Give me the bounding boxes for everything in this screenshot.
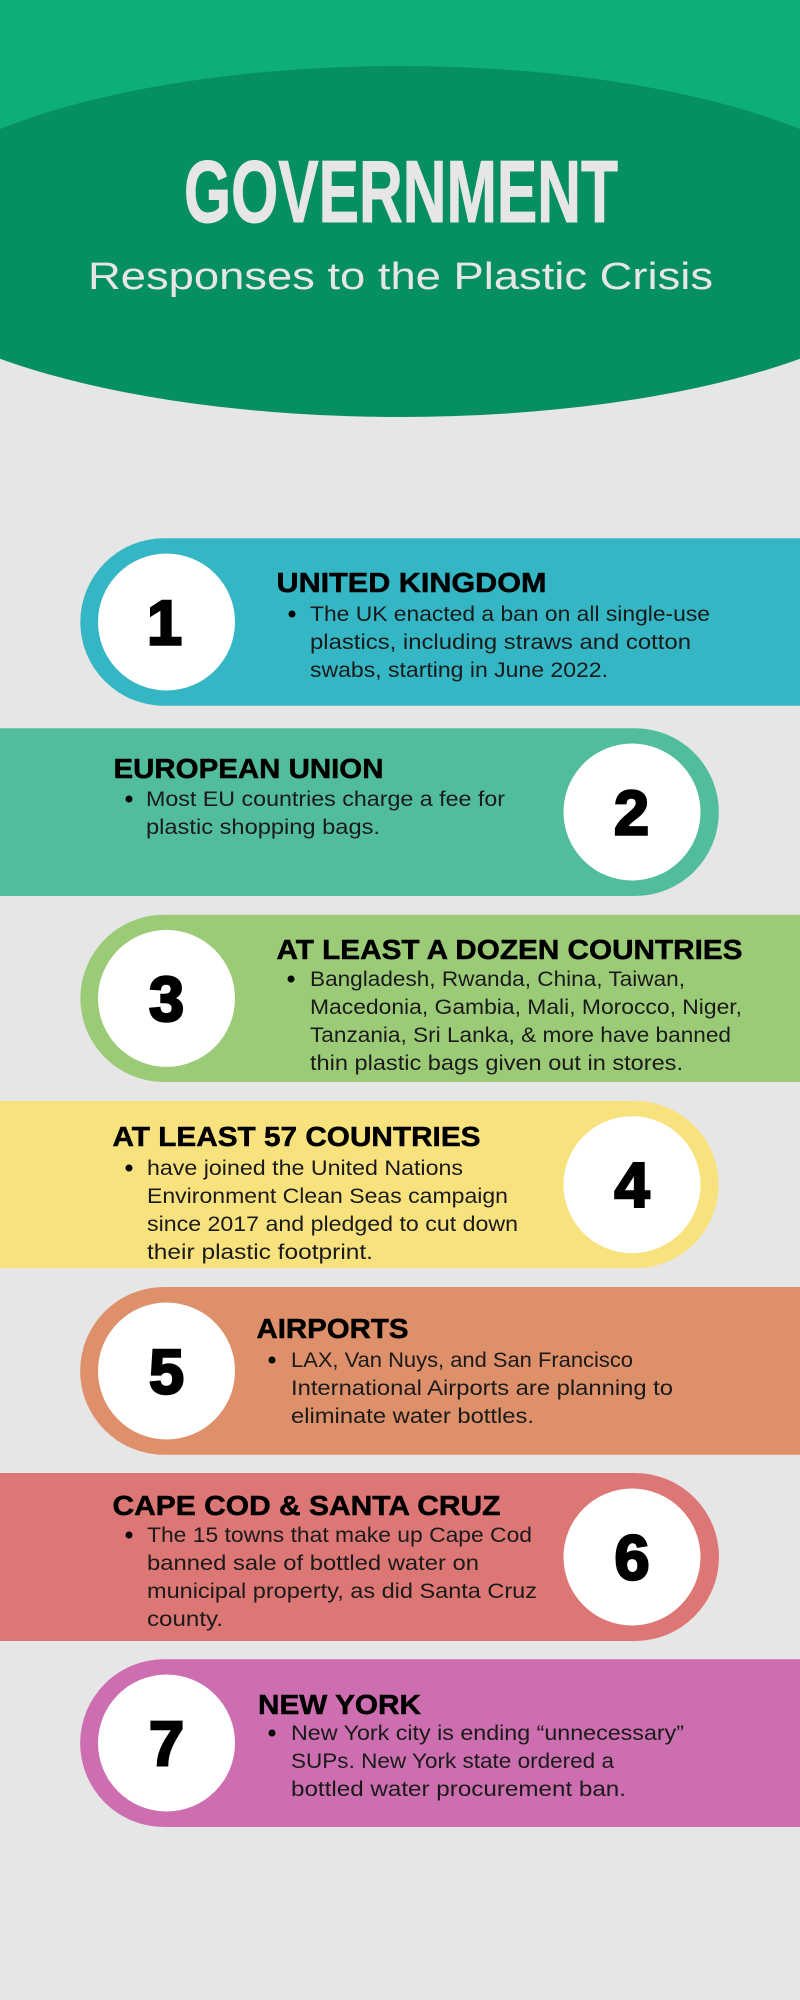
number badge 5 xyxy=(98,1302,235,1440)
heading 1: UNITED KINGDOM xyxy=(276,567,546,598)
number badge 2: 2 xyxy=(614,778,649,848)
number badge 3: 3 xyxy=(149,965,184,1035)
text block 4: their plastic footprint. xyxy=(147,1241,373,1264)
heading 6: CAPE COD & SANTA CRUZ xyxy=(112,1490,500,1521)
text block 4: since 2017 and pledged to cut down xyxy=(147,1213,518,1236)
number badge 3 xyxy=(98,930,235,1067)
title: GOVERNMENT xyxy=(184,142,618,241)
text block 6: county. xyxy=(147,1608,223,1631)
text block 1: swabs, starting in June 2022. xyxy=(310,659,608,682)
text block 6: banned sale of bottled water on xyxy=(147,1552,479,1575)
text block 6: The 15 towns that make up Cape Cod xyxy=(147,1524,532,1547)
heading 2: EUROPEAN UNION xyxy=(114,753,384,784)
number badge 1 xyxy=(98,554,235,690)
number badge 5: 5 xyxy=(149,1338,184,1408)
text block 4: Environment Clean Seas campaign xyxy=(147,1185,508,1208)
number badge 6: 6 xyxy=(614,1524,650,1594)
number badge 4 xyxy=(564,1116,700,1253)
panel 7: New York xyxy=(80,1659,800,1827)
text block 4: have joined the United Nations xyxy=(147,1157,463,1180)
panel 4: At least 57 countries xyxy=(0,1101,719,1268)
text block 3 xyxy=(288,968,742,1075)
panel 6: Cape Cod and Santa Cruz xyxy=(0,1473,719,1641)
text block 5: LAX, Van Nuys, and San Francisco xyxy=(291,1349,633,1372)
text block 1 xyxy=(288,603,710,682)
panel 2: European Union xyxy=(0,728,719,896)
text block 3: Macedonia, Gambia, Mali, Morocco, Niger, xyxy=(310,996,742,1019)
text block 3: Bangladesh, Rwanda, China, Taiwan, xyxy=(310,968,685,991)
text block 3: thin plastic bags given out in stores. xyxy=(310,1052,683,1075)
text block 1: plastics, including straws and cotton xyxy=(310,631,691,654)
text block 7 xyxy=(268,1722,684,1801)
text block 3: Tanzania, Sri Lanka, & more have banned xyxy=(310,1024,731,1047)
panel 3: At least a dozen countries xyxy=(80,915,800,1082)
number badge 6 xyxy=(564,1488,700,1626)
heading 4: AT LEAST 57 COUNTRIES xyxy=(112,1121,480,1152)
number badge 7 xyxy=(98,1674,235,1812)
heading 7: NEW YORK xyxy=(258,1689,421,1720)
header banner xyxy=(0,0,800,417)
text block 2: Most EU countries charge a fee for xyxy=(146,788,505,811)
text block 5 xyxy=(268,1349,673,1428)
number badge 1: 1 xyxy=(147,588,182,658)
text block 5: eliminate water bottles. xyxy=(291,1405,534,1428)
text block 1: The UK enacted a ban on all single-use xyxy=(310,603,710,626)
panel 5: Airports xyxy=(80,1287,800,1455)
heading 5: AIRPORTS xyxy=(256,1313,408,1344)
number badge 2 xyxy=(564,744,700,880)
subtitle: Responses to the Plastic Crisis xyxy=(88,256,713,298)
text block 4 xyxy=(126,1157,518,1264)
text block 7: New York city is ending “unnecessary” xyxy=(291,1722,684,1745)
number badge 7: 7 xyxy=(149,1710,184,1780)
text block 5: International Airports are planning to xyxy=(291,1377,673,1400)
text block 2: plastic shopping bags. xyxy=(146,816,380,839)
text block 6 xyxy=(126,1524,537,1631)
text block 7: SUPs. New York state ordered a xyxy=(291,1750,614,1773)
text block 2 xyxy=(126,788,505,839)
text block 7: bottled water procurement ban. xyxy=(291,1778,626,1801)
panel 1: United Kingdom xyxy=(80,538,800,706)
number badge 4: 4 xyxy=(614,1151,650,1221)
text block 6: municipal property, as did Santa Cruz xyxy=(147,1580,537,1603)
heading 3: AT LEAST A DOZEN COUNTRIES xyxy=(276,934,742,965)
